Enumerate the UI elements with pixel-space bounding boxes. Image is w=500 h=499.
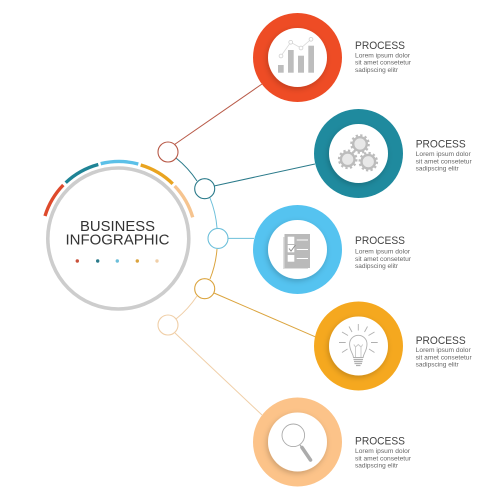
connector lines [174, 84, 315, 415]
text block: PROCESS [355, 40, 405, 52]
node circles [158, 142, 228, 335]
text block [416, 139, 473, 172]
text block: sadipscing elitr [355, 67, 399, 74]
text block: sadipscing elitr [416, 362, 460, 369]
panel: process 2 [314, 109, 473, 198]
icon: magnifier [282, 424, 310, 460]
text block [355, 435, 412, 470]
text block: PROCESS [416, 139, 466, 151]
panel: process 4 [314, 302, 473, 390]
text block: sit amet consetetur [416, 354, 473, 362]
icon: light bulb [339, 324, 378, 366]
text block: Lorem ipsum dolor [416, 151, 472, 158]
text block: sadipscing elitr [355, 263, 399, 270]
icon: checklist [283, 234, 310, 269]
text block [355, 40, 412, 74]
text block: sadipscing elitr [416, 166, 460, 172]
title [66, 219, 170, 248]
title: INFOGRAPHIC [66, 232, 170, 248]
text block: sit amet consetetur [355, 455, 412, 462]
coloured arc segments [45, 162, 193, 217]
text block: PROCESS [355, 435, 405, 447]
text block: Lorem ipsum dolor [355, 52, 411, 59]
title: BUSINESS [80, 219, 155, 235]
panel: process 1 [253, 13, 412, 102]
text block [416, 335, 473, 369]
dots [76, 259, 159, 263]
text block: PROCESS [355, 235, 405, 247]
main circle [45, 162, 193, 309]
text block: Lorem ipsum dolor [416, 347, 472, 354]
icon: bar chart [278, 37, 314, 73]
text block: sit amet consetetur [355, 60, 412, 66]
text block: Lorem ipsum dolor [355, 248, 411, 256]
panel: process 5 [253, 398, 412, 486]
text block [355, 235, 412, 270]
panel: process 3 [253, 205, 412, 294]
text block: sadipscing elitr [355, 462, 399, 470]
text block: sit amet consetetur [355, 256, 412, 263]
icon: gears [339, 135, 377, 170]
text block: Lorem ipsum dolor [355, 448, 411, 455]
text block: sit amet consetetur [416, 158, 473, 165]
text block: PROCESS [416, 335, 466, 347]
